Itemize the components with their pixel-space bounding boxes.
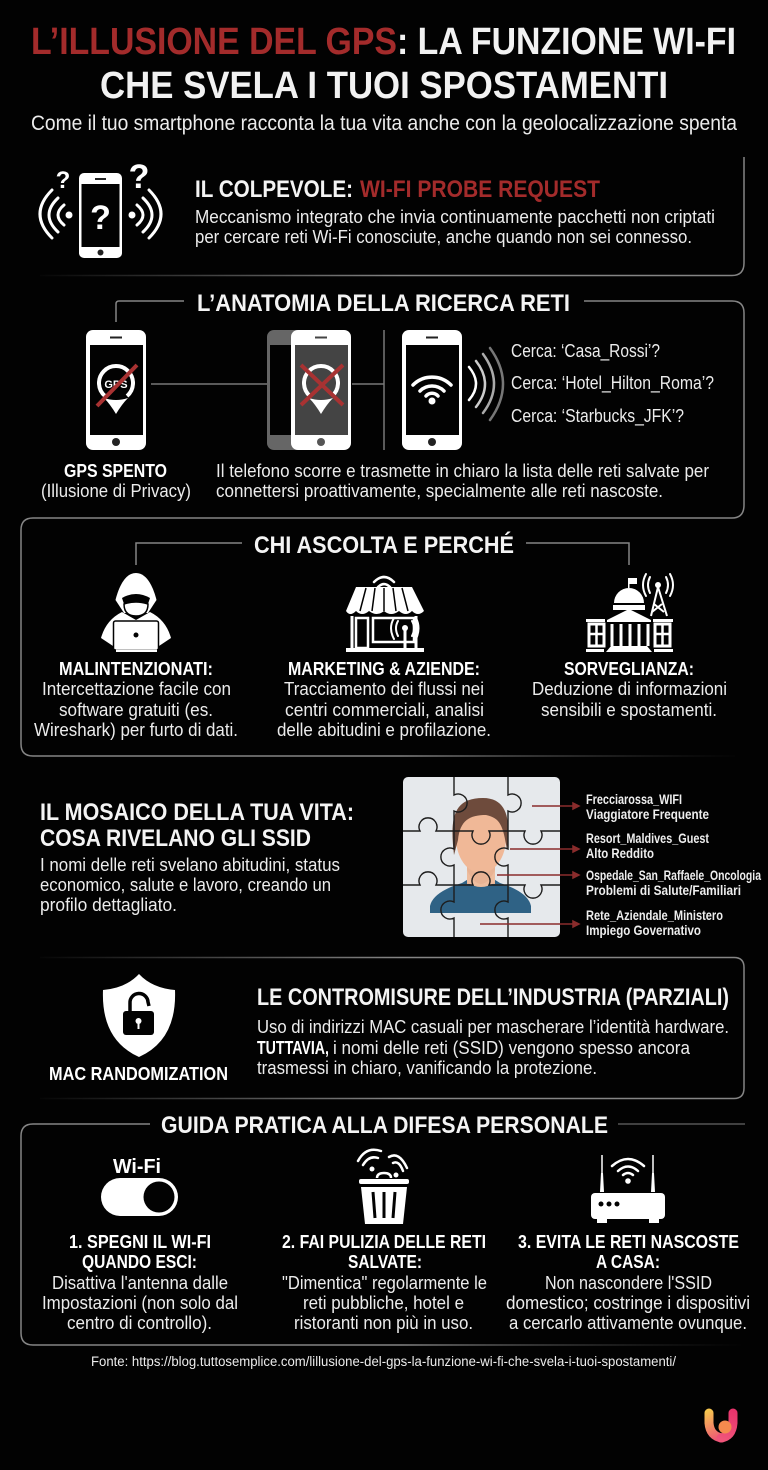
text: step 2: 2. FAI PULIZIA DELLE RETI [282,1232,486,1252]
text: marketing: Tracciamento dei flussi nei [284,679,484,699]
text: marketing: MARKETING & AZIENDE: [288,659,480,679]
text: malintenzionati: MALINTENZIONATI: [59,659,213,679]
label: mac randomization: MAC RANDOMIZATION [49,1064,228,1084]
icon: phone wifi [402,330,462,450]
icon: phone ghost with crossed pin [267,330,351,450]
icon: phone with question mark [40,158,161,258]
icon: phone with question mark: ? [56,167,70,194]
panel: chi ascolta e perché [34,531,727,740]
icon: shield with open lock [103,974,175,1057]
text: marketing: centri commerciali, analisi [285,700,484,720]
labels: ssid: Problemi di Salute/Familiari [586,883,741,898]
panel: guida pratica [21,1112,750,1345]
text: step 1: QUANDO ESCI: [82,1252,197,1272]
labels: ssid: Alto Reddito [586,846,654,861]
heading: anatomia: L’ANATOMIA DELLA RICERCA RETI [197,290,570,317]
text: step 2: "Dimentica" regolarmente le [282,1273,487,1293]
text: step 2: ristoranti non più in uso. [294,1313,473,1333]
text: sorveglianza: Deduzione di informazioni [532,679,727,699]
arrows: red pointers [480,803,579,927]
labels: ssid: Rete_Aziendale_Ministero [586,908,723,923]
panel: anatomia della ricerca reti [21,290,744,756]
text: searched networks: Cerca: ‘Hotel_Hilton_Roma’? [511,373,714,394]
text: step 2: SALVATE: [348,1252,422,1272]
panel: il colpevole [40,157,744,276]
text: searched networks [511,341,714,427]
text: step 2: reti pubbliche, hotel e [303,1293,464,1313]
text: marketing [277,659,491,740]
text: mosaico: I nomi delle reti svelano abitudini, status [40,855,340,875]
text: searched networks: Cerca: ‘Starbucks_JFK’? [511,406,684,427]
heading: il colpevole: IL COLPEVOLE: [195,176,353,203]
text: malintenzionati [34,659,238,740]
text: contromisure: i nomi delle reti (SSID) vengono spesso ancora [333,1038,691,1058]
text: step 1 [42,1232,238,1333]
puzzle portrait [403,777,560,937]
icon: signal waves [469,348,503,420]
text: step 3: Non nascondere l'SSID [545,1273,712,1293]
title: : LA FUNZIONE WI-FI [397,21,736,63]
text: contromisure: trasmessi in chiaro, vanificando la protezione. [257,1058,597,1078]
text: contromisure [257,1017,729,1078]
icon: phone gps off [86,330,146,450]
heading: mosaico: IL MOSAICO DELLA TUA VITA: [40,799,354,826]
text: step 1: 1. SPEGNI IL WI-FI [69,1232,211,1252]
text: mosaico: profilo dettagliato. [40,895,177,915]
text: step 3: A CASA: [596,1252,660,1272]
labels: ssid: Impiego Governativo [586,923,701,938]
icon: government building with tower [586,574,673,652]
text: step 3: domestico; costringe i dispositivi [506,1293,750,1313]
title: CHE SVELA I TUOI SPOSTAMENTI [100,65,668,107]
icon: router [591,1155,665,1223]
heading: guida: GUIDA PRATICA ALLA DIFESA PERSONALE [161,1112,608,1139]
title: L’ILLUSIONE DEL GPS [31,21,397,63]
text: marketing: delle abitudini e profilazione. [277,720,491,740]
label: gps spento: GPS SPENTO [64,461,167,481]
source line: Fonte: https://blog.tuttosemplice.com/lillusione-del-gps-la-funzione-wi-fi-che-svela-i-tuoi-spostamenti/ [91,1354,676,1369]
text: description [216,461,709,501]
heading: mosaico [40,799,354,852]
icon: shop [346,577,424,652]
text: malintenzionati: software gratuiti (es. [59,700,213,720]
text: mosaico: economico, salute e lavoro, creando un [40,875,331,895]
labels: ssid: Resort_Maldives_Guest [586,831,709,846]
panel: il mosaico della tua vita [40,777,761,938]
text: description: Il telefono scorre e trasmette in chiaro la lista delle reti salvate per [216,461,709,481]
text: contromisure: TUTTAVIA, [257,1038,329,1058]
text: meccanismo: per cercare reti Wi-Fi conosciute, anche quando non sei connesso. [195,227,692,247]
text: description: connettersi proattivamente, specialmente alle reti nascoste. [216,481,663,501]
heading: mosaico: COSA RIVELANO GLI SSID [40,825,311,852]
icon: wifi toggle [101,1156,178,1216]
text: sorveglianza: SORVEGLIANZA: [564,659,694,679]
icon: phone with question mark: ? [129,158,149,196]
text: meccanismo [195,207,715,247]
text: step 1: centro di controllo). [67,1313,212,1333]
text: sorveglianza: sensibili e spostamenti. [541,700,717,720]
text: searched networks: Cerca: ‘Casa_Rossi’? [511,341,660,362]
text: step 2 [282,1232,487,1333]
text: step 3 [506,1232,750,1333]
icon: wifi toggle: Wi-Fi [113,1156,161,1178]
heading: chi ascolta: CHI ASCOLTA E PERCHÉ [254,531,514,559]
labels: ssid: Frecciarossa_WIFI [586,792,682,807]
text: meccanismo: Meccanismo integrato che invia continuamente pacchetti non criptati [195,207,715,227]
title [31,21,736,107]
labels: ssid [586,792,761,938]
text: step 1: Disattiva l'antenna dalle [52,1273,228,1293]
text: step 3: 3. EVITA LE RETI NASCOSTE [518,1232,739,1252]
text: contromisure: Uso di indirizzi MAC casuali per mascherare l’identità hardware. [257,1017,729,1037]
icon: phone with question mark: ? [90,199,111,237]
logo [709,1413,733,1438]
text: step 1: Impostazioni (non solo dal [42,1293,238,1313]
panel: contromisure [40,958,744,1098]
label: gps spento [41,461,191,501]
heading: il colpevole: WI-FI PROBE REQUEST [360,176,600,203]
heading: il colpevole [195,176,600,203]
label: gps spento: (Illusione di Privacy) [41,481,191,501]
icon: trash with wifi [358,1150,409,1224]
text: malintenzionati: Intercettazione facile con [42,679,231,699]
text: malintenzionati: Wireshark) per furto di dati. [34,720,238,740]
labels: ssid: Viaggiatore Frequente [586,807,709,822]
text: sorveglianza [532,659,727,720]
icon: hacker [101,573,171,652]
text: mosaico [40,855,340,915]
icon: phone gps off: GPS [104,379,128,391]
text: step 3: a cercarlo attivamente ovunque. [509,1313,747,1333]
